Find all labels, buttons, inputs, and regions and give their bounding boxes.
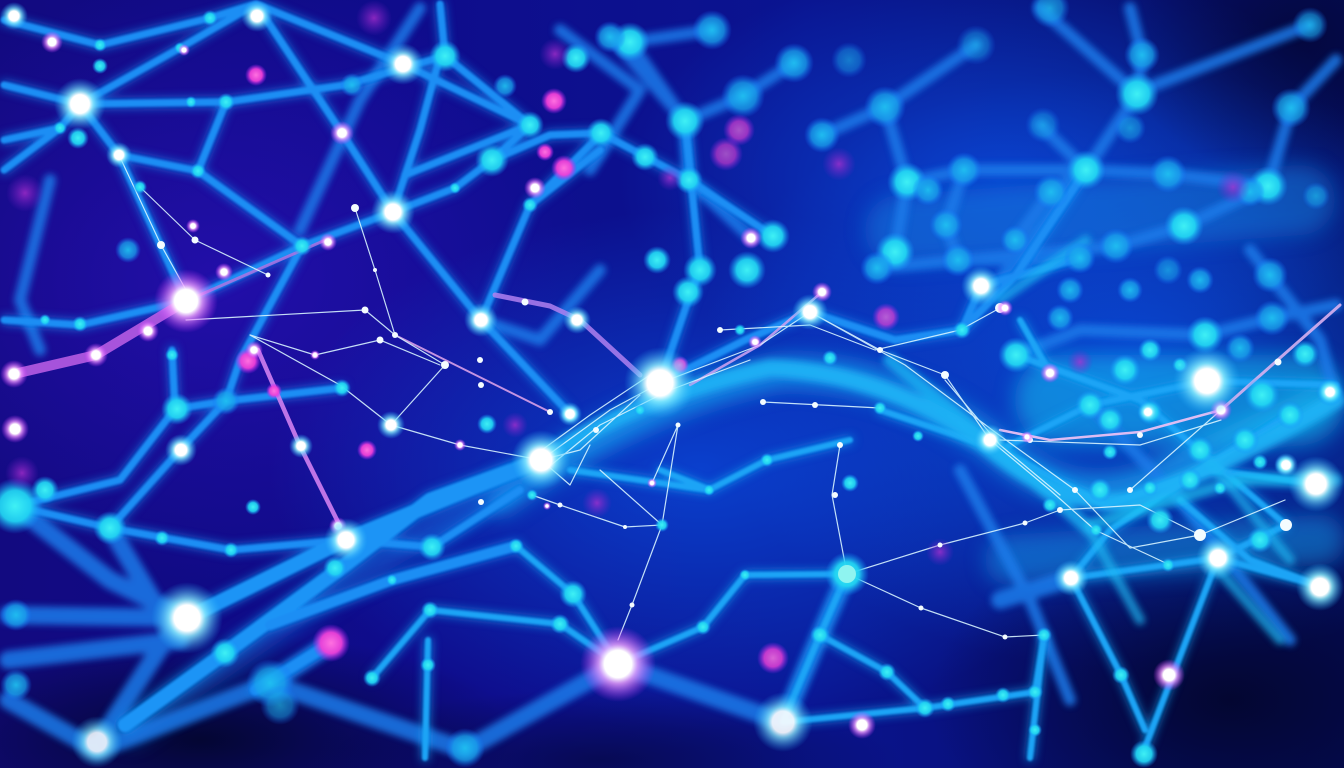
tiny white connection nodes: [157, 204, 1292, 640]
pink-violet connections: [14, 238, 1340, 526]
thin bright connections: [119, 155, 1285, 640]
defocused magenta nodes: [5, 0, 1250, 566]
bright glow band: [130, 200, 1320, 730]
glowing cyan trunk arcs: [541, 240, 1336, 640]
